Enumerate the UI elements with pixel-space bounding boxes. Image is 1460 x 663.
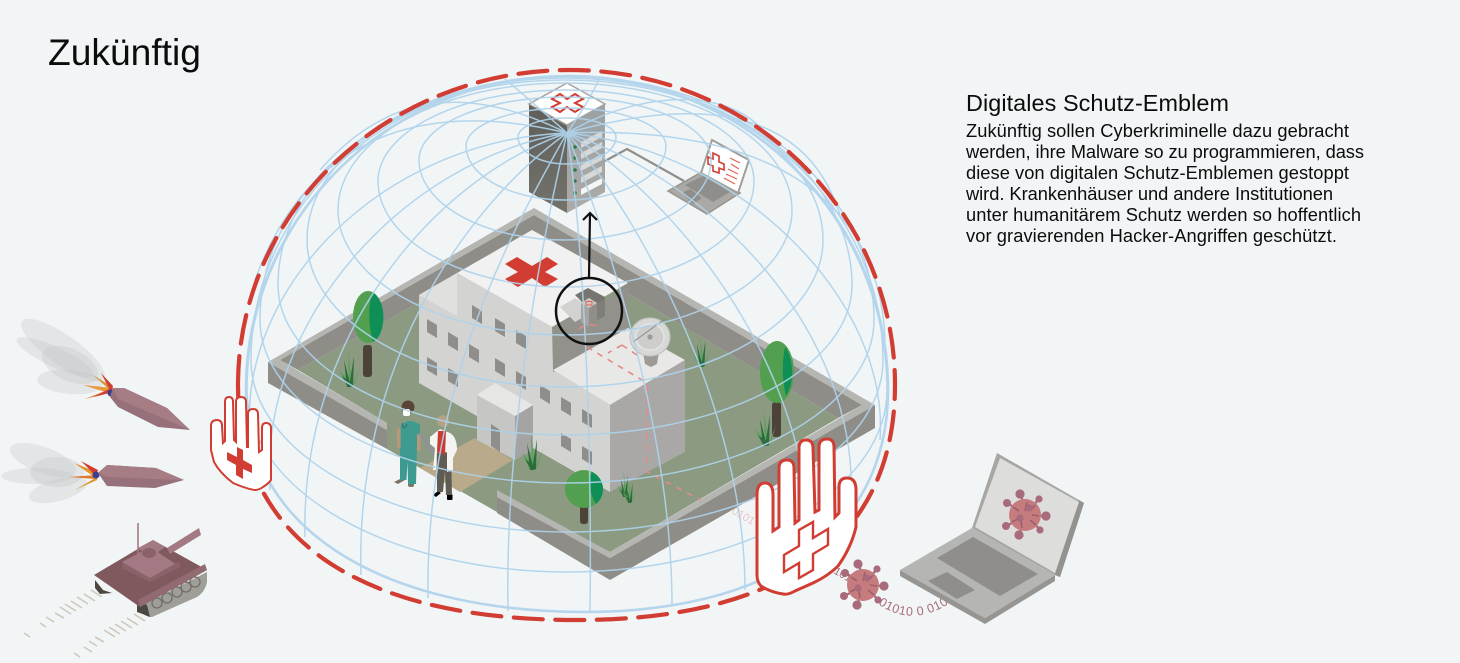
body text: diese von digitalen Schutz-Emblemen gestoppt	[966, 162, 1349, 183]
binary data stream	[832, 565, 947, 616]
entrance path	[420, 438, 513, 492]
doctor	[418, 415, 457, 500]
flames	[83, 373, 114, 399]
satellite dish	[630, 318, 670, 367]
track marks	[24, 590, 145, 657]
tree right	[760, 341, 794, 437]
screen	[975, 458, 1079, 573]
missile lower	[1, 436, 184, 508]
heading: Digitales Schutz-Emblem	[966, 90, 1229, 116]
body text: wird. Krankenhäuser und andere Institutionen	[965, 183, 1333, 204]
tank	[24, 523, 207, 657]
dome latitude rings	[247, 76, 887, 572]
lens circle on rooftop	[556, 278, 622, 344]
text block: Digitales Schutz-Emblem	[965, 90, 1364, 246]
wall: recess	[419, 273, 457, 316]
tree front	[565, 470, 603, 524]
tracks	[95, 580, 112, 594]
red dashed protection boundary	[238, 70, 895, 620]
trackpad	[928, 572, 975, 599]
wall: block right side	[610, 360, 685, 492]
ground lawn	[298, 238, 845, 552]
red cross on roof	[505, 257, 558, 287]
roof: rear block	[553, 328, 685, 405]
front walls	[268, 360, 875, 580]
protective dome wireframe	[247, 76, 887, 612]
faint binary behind hand: 0101	[730, 505, 757, 528]
base	[900, 528, 1055, 618]
attacker laptop	[900, 453, 1084, 624]
body	[110, 388, 190, 430]
cross outline	[784, 522, 828, 578]
body text: Zukünftig sollen Cyberkriminelle dazu gebracht	[966, 120, 1349, 141]
cable server to laptop	[605, 149, 684, 181]
walled compound: back walls	[268, 208, 875, 418]
body text	[965, 120, 1364, 246]
hand emblem small	[211, 397, 271, 490]
nurse	[394, 400, 421, 487]
base side	[900, 570, 1055, 624]
recess inner wall	[553, 287, 628, 372]
entrance vestibule	[477, 383, 533, 460]
arrow up to server	[583, 213, 597, 277]
turret	[138, 540, 165, 558]
smoke trail	[13, 309, 113, 397]
body text: unter humanitärem Schutz werden so hoffentlich	[966, 204, 1361, 225]
dome outline	[246, 76, 888, 612]
hand emblem large	[757, 439, 856, 594]
virus on screen	[1002, 489, 1051, 540]
smoke trail	[1, 436, 90, 508]
grass tufts	[339, 336, 776, 503]
body text: werden, ihre Malware so zu programmieren, dass	[965, 141, 1364, 162]
binary data stream: 1010	[832, 565, 859, 588]
dashed signal lines	[579, 324, 722, 512]
screen frame	[972, 453, 1084, 577]
body text: vor gravierenden Hacker-Angriffen geschützt.	[966, 225, 1337, 246]
flames	[68, 461, 100, 490]
rooftop server room	[560, 288, 605, 327]
windows	[427, 305, 592, 465]
antenna	[137, 523, 139, 555]
barrel	[167, 528, 201, 554]
hull	[94, 540, 207, 607]
body	[98, 465, 184, 488]
hospital building	[419, 230, 685, 492]
dome meridians	[249, 77, 885, 612]
wall: main front	[419, 273, 610, 492]
small laptop	[668, 140, 749, 214]
turret base	[122, 547, 180, 582]
tree left	[353, 291, 383, 377]
roof: main wing	[457, 230, 628, 327]
missile upper	[13, 309, 190, 430]
keyboard	[937, 537, 1038, 596]
red cross	[227, 447, 252, 479]
binary data stream: 01010 0 010	[880, 598, 947, 616]
server rack	[529, 83, 605, 213]
virus	[840, 559, 889, 610]
title: Zukünftig	[48, 31, 201, 73]
